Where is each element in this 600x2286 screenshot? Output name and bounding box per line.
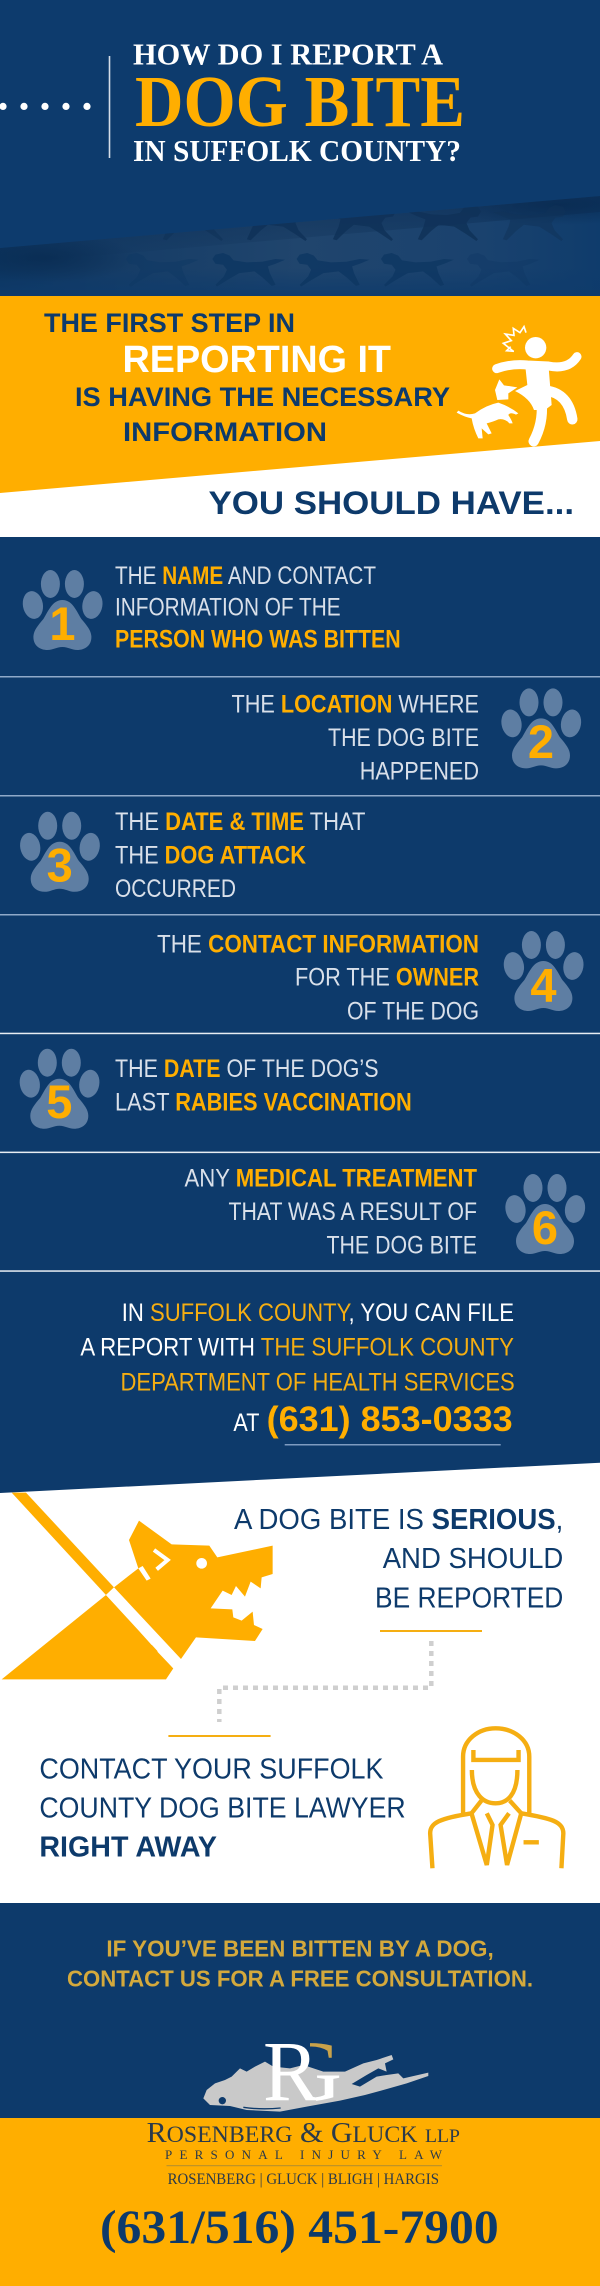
item 3: 3 <box>47 839 73 892</box>
icon: snarling dog on leash <box>2 1493 273 1679</box>
panel: contact yellow <box>0 2118 600 2286</box>
item 1: INFORMATION OF THE <box>115 594 341 622</box>
item 4: OF THE DOG <box>347 998 479 1026</box>
item 3: THE DATE & TIME THAT <box>115 808 366 836</box>
item 2: THE LOCATION WHERE <box>232 691 479 719</box>
item 5: 5 <box>46 1075 72 1128</box>
text block: file a report: DEPARTMENT OF HEALTH SERVICES <box>120 1369 515 1397</box>
item 4: 4 <box>530 959 556 1012</box>
text: contact your lawyer: COUNTY DOG BITE LAWYER <box>39 1792 406 1824</box>
item 6: ANY MEDICAL TREATMENT <box>184 1165 477 1193</box>
heading: you should have: YOU SHOULD HAVE... <box>208 485 574 521</box>
heading: first step: IS HAVING THE NECESSARY <box>75 382 450 412</box>
text: a dog bite is serious: A DOG BITE IS SERIOUS, <box>234 1504 563 1536</box>
item 2 <box>232 688 583 786</box>
text block: file a report <box>80 1299 515 1446</box>
panel: first step yellow <box>0 296 600 493</box>
item 1 <box>21 562 401 654</box>
title: HOW DO I REPORT A <box>133 37 444 72</box>
item 2: 2 <box>528 715 554 768</box>
firm name block: PERSONAL INJURY LAW <box>165 2147 443 2162</box>
logo: Long Island with RG monogram: R <box>263 2023 320 2119</box>
heading: first step: THE FIRST STEP IN <box>44 308 295 338</box>
item 6 <box>184 1165 587 1260</box>
item 3: OCCURRED <box>115 875 236 903</box>
heading: first step: INFORMATION <box>123 417 327 447</box>
text: contact your lawyer: RIGHT AWAY <box>39 1832 217 1864</box>
panel: consultation footer <box>0 1903 600 2118</box>
item 1: PERSON WHO WAS BITTEN <box>115 626 401 654</box>
firm name block <box>147 2117 460 2188</box>
title: DOG BITE <box>135 61 465 142</box>
text: a dog bite is serious <box>234 1504 563 1614</box>
text: contact your lawyer: CONTACT YOUR SUFFOLK <box>39 1753 384 1785</box>
text block: file a report: (631) 853-0333 <box>267 1400 513 1439</box>
item 3 <box>18 808 366 903</box>
text block: file a report: A REPORT WITH THE SUFFOLK COUNTY <box>80 1334 514 1362</box>
text: contact your lawyer <box>39 1753 406 1864</box>
item 1: 1 <box>49 597 75 650</box>
item 4: FOR THE OWNER <box>295 964 479 992</box>
heading: first step: REPORTING IT <box>122 339 391 381</box>
text: free consultation: CONTACT US FOR A FREE CONSULTATION. <box>67 1966 533 1992</box>
text: free consultation: IF YOU’VE BEEN BITTEN BY A DOG, <box>106 1936 494 1962</box>
item 6: THAT WAS A RESULT OF <box>228 1198 477 1226</box>
logo: Long Island with RG monogram <box>203 2043 428 2112</box>
connector: dotted path <box>168 1630 482 1737</box>
item 5: THE DATE OF THE DOG’S <box>115 1055 378 1083</box>
logo: Long Island with RG monogram: G <box>276 2023 342 2119</box>
item 6: 6 <box>532 1201 558 1254</box>
item 4 <box>157 931 586 1026</box>
item 5: LAST RABIES VACCINATION <box>115 1089 412 1117</box>
text: free consultation <box>67 1936 533 1992</box>
icon: lawyer <box>430 1728 563 1868</box>
item 6: THE DOG BITE <box>326 1232 477 1260</box>
item 5 <box>18 1049 412 1129</box>
text block: file a report: AT <box>233 1409 259 1437</box>
logo: Long Island with RG monogram: G <box>276 2023 342 2119</box>
textured band with running dogs <box>0 196 600 288</box>
title <box>0 37 465 168</box>
text: a dog bite is serious: AND SHOULD <box>383 1543 563 1575</box>
firm name block: ROSENBERG & GLUCK LLP <box>147 2117 460 2149</box>
heading: first step <box>44 308 450 447</box>
phone number: (631/516) 451-7900 <box>100 2201 499 2254</box>
item 4: THE CONTACT INFORMATION <box>157 931 479 959</box>
item 3: THE DOG ATTACK <box>115 842 306 870</box>
firm name block: ROSENBERG | GLUCK | BLIGH | HARGIS <box>168 2171 439 2188</box>
panel: header background <box>0 0 600 296</box>
icon: dog attacking person <box>457 327 577 441</box>
panel: checklist background <box>0 537 600 1493</box>
text: a dog bite is serious: BE REPORTED <box>375 1582 563 1614</box>
text block: file a report: IN SUFFOLK COUNTY, YOU CAN FILE <box>122 1299 514 1327</box>
item 2: THE DOG BITE <box>328 724 479 752</box>
title: IN SUFFOLK COUNTY? <box>133 133 461 168</box>
item 2: HAPPENED <box>360 758 479 786</box>
item 1: THE NAME AND CONTACT <box>115 562 376 590</box>
